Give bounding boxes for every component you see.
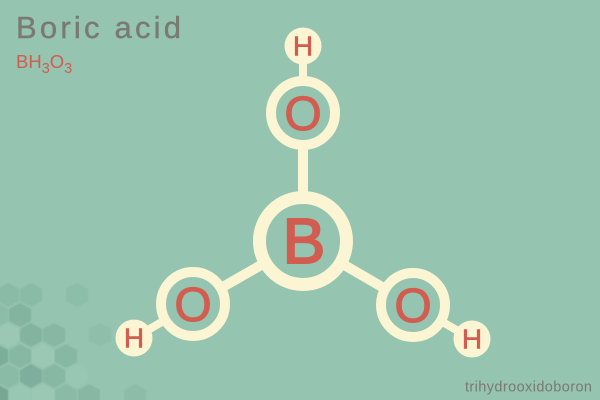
molecule diagram [116, 28, 490, 358]
chemical formula: 3 [64, 61, 72, 77]
atom: left oxygen [161, 272, 225, 336]
title: Boric acid [16, 10, 181, 45]
atom: left hydrogen: H [124, 322, 144, 354]
atom: top oxygen [271, 81, 335, 145]
chemical formula: O [50, 51, 64, 72]
chemical formula: 3 [42, 61, 50, 77]
decorative hexagon pattern [0, 283, 146, 400]
atom: right hydrogen [454, 320, 490, 358]
atom: right oxygen [381, 273, 445, 337]
atom: right hydrogen: H [462, 324, 482, 354]
atom: right oxygen: O [394, 280, 432, 333]
atom: top hydrogen: H [293, 30, 313, 62]
atom: top hydrogen [284, 28, 322, 64]
atom: left oxygen: O [174, 279, 212, 332]
atom: top oxygen: O [284, 88, 322, 141]
atom: left hydrogen [116, 320, 152, 356]
bonds [134, 46, 472, 339]
IUPAC name: trihydrooxidoboron [465, 380, 592, 396]
atom: boron [260, 198, 346, 284]
atom: boron: B [283, 205, 325, 277]
chemical formula: BH [16, 51, 42, 72]
